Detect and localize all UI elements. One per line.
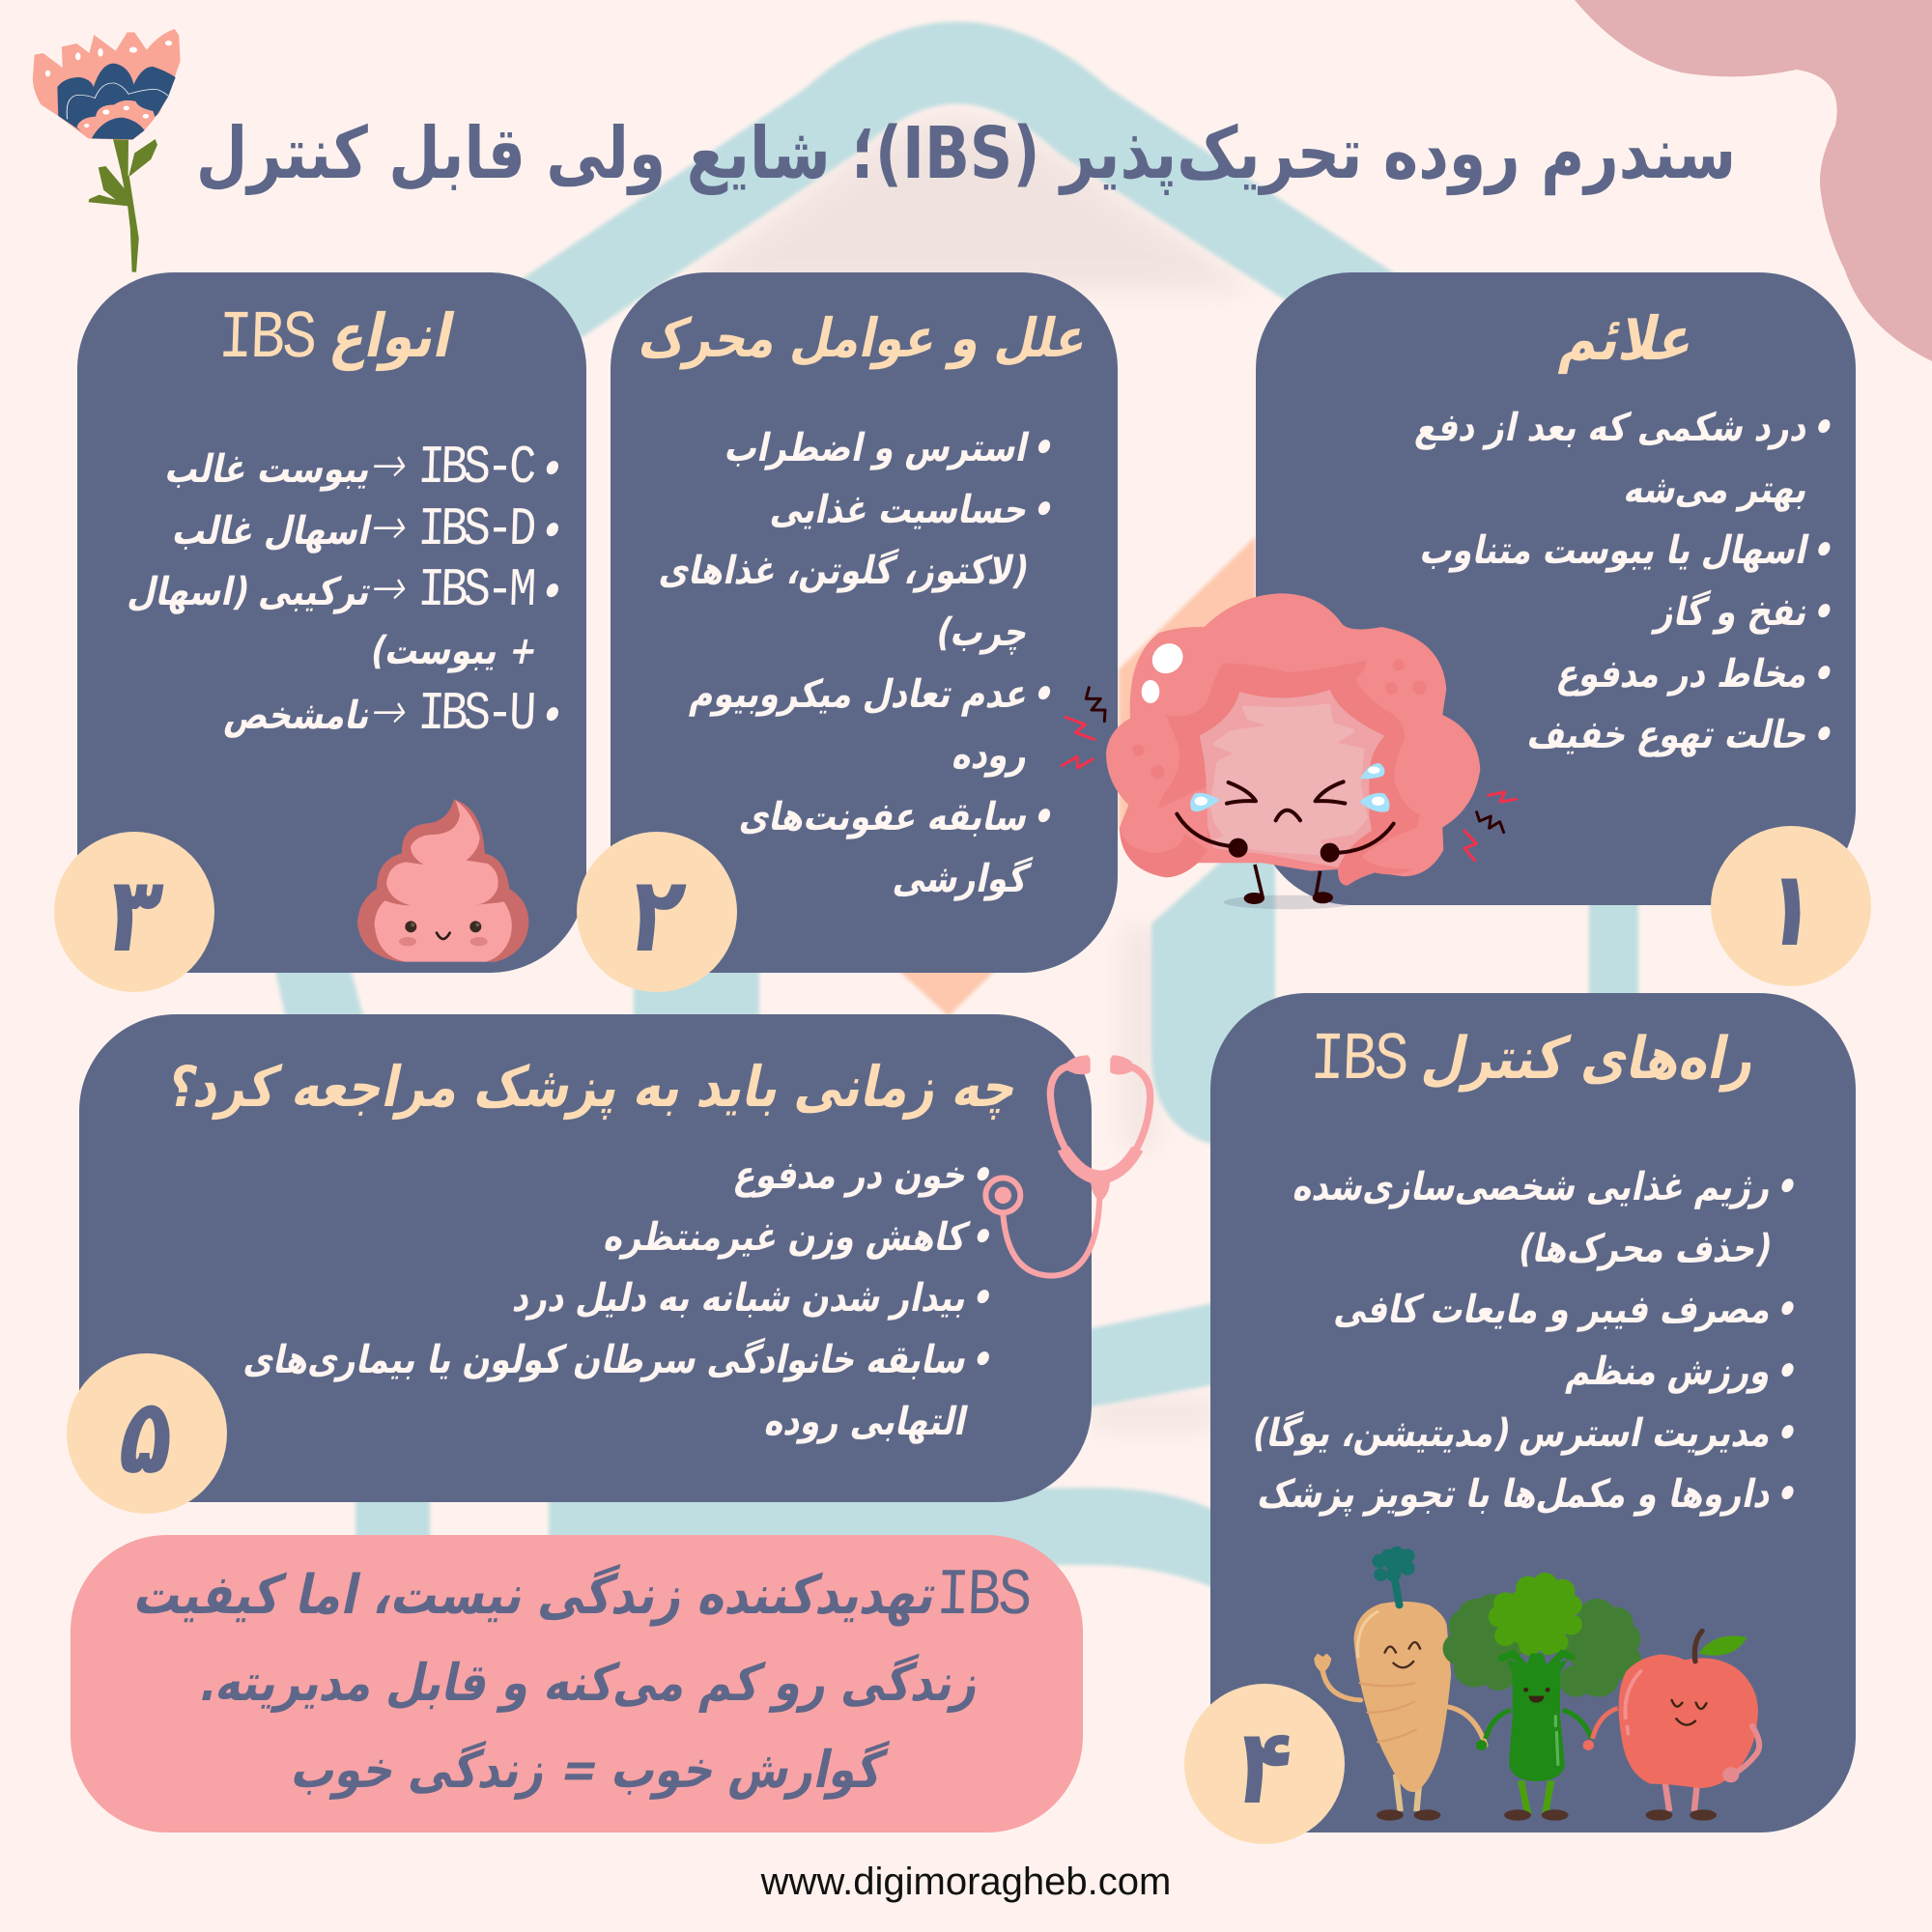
list: symptoms: • (1809, 406, 1839, 450)
title: سندرم روده تحریک‌پذیر (IBS)؛ شایع ولی قابل کنترل (196, 112, 1736, 195)
list: types: • (537, 570, 567, 614)
list: causes: • (1029, 426, 1059, 470)
list: causes: • (1029, 795, 1059, 839)
panel: types of IBS (77, 272, 586, 973)
list: types: IBS-U (417, 683, 533, 745)
list: symptoms: بهتر می‌شه (1621, 468, 1813, 512)
apple (1583, 1631, 1759, 1821)
list: doctor: بیدار شدن شبانه به دلیل درد (509, 1276, 972, 1321)
number badge 5: ۵ (112, 1377, 182, 1497)
number badge 2: ۲ (622, 855, 692, 976)
list: causes: (لاکتوز، گلوتن، غذاهای (656, 549, 1033, 593)
heading: types: انواع (326, 300, 461, 371)
list: management: رژیم غذایی شخصی‌سازی‌شده (1290, 1165, 1776, 1209)
list: types: IBS-C (417, 437, 533, 498)
list: causes: چرب) (932, 611, 1033, 655)
heading: types (216, 300, 461, 378)
callout: summary: تهدیدکننده زندگی نیست، اما کیفیت (129, 1564, 943, 1627)
list: doctor: کاهش وزن غیرمنتظره (601, 1215, 972, 1260)
list: causes: استرس و اضطراب (722, 426, 1033, 470)
list: types: →یبوست غالب (162, 437, 413, 495)
list: types: • (537, 447, 567, 492)
list: types: →ترکیبی (اسهال (125, 559, 413, 617)
list: management: (حذف محرک‌ها) (1515, 1227, 1776, 1271)
number badge 3: ۳ (99, 855, 169, 976)
list: management: داروها و مکمل‌ها با تجویز پزشک (1255, 1472, 1776, 1517)
list: symptoms: مخاط در مدفوع (1554, 652, 1813, 696)
list: symptoms: نفخ و گاز (1653, 590, 1813, 635)
list: causes (656, 426, 1059, 901)
callout: summary: IBS (935, 1559, 1030, 1634)
number badge 5 (67, 1353, 227, 1514)
broccoli (1443, 1573, 1642, 1821)
heading: causes: علل و عوامل محرک (635, 307, 1094, 370)
list: management: • (1773, 1472, 1803, 1517)
list: types: • (537, 509, 567, 554)
number badge 1 (1711, 826, 1871, 986)
callout: summary (71, 1535, 1083, 1833)
list: symptoms: • (1809, 713, 1839, 757)
callout: summary: گوارش خوب = زندگی خوب (287, 1741, 890, 1800)
list: causes: روده (949, 733, 1033, 778)
list: management: • (1773, 1350, 1803, 1394)
list: doctor: التهابی روده (761, 1400, 972, 1444)
list: management: • (1773, 1165, 1803, 1209)
heading: doctor: چه زمانی باید به پزشک مراجعه کرد؟ (161, 1054, 1025, 1120)
list: management: مدیریت استرس (مدیتیشن، یوگا) (1249, 1411, 1776, 1456)
panel: causes and triggers (611, 272, 1118, 973)
list: management: مصرف فیبر و مایعات کافی (1331, 1288, 1776, 1332)
list: symptoms: • (1809, 590, 1839, 635)
heading: types: IBS (216, 301, 315, 378)
heading: management (1309, 1023, 1763, 1099)
list: symptoms: حالت تهوع خفیف (1524, 713, 1813, 757)
list: types (125, 437, 567, 745)
list: types: IBS-D (417, 498, 533, 560)
list: symptoms: • (1809, 652, 1839, 696)
list: symptoms: اسهال یا یبوست متناوب (1417, 528, 1813, 573)
panel: symptoms (1256, 272, 1856, 905)
panel: management (1210, 993, 1856, 1833)
footer website: www.digimoragheb.com (761, 1861, 1171, 1903)
list: doctor: سابقه خانوادگی سرطان کولون یا بیماری‌های (241, 1338, 972, 1382)
number badge 4: ۴ (1230, 1707, 1299, 1828)
list: doctor: • (968, 1153, 998, 1198)
list: causes: سابقه عفونت‌های (736, 795, 1033, 839)
number badge 1: ۱ (1756, 849, 1826, 970)
list: doctor: • (968, 1215, 998, 1260)
list: causes: • (1029, 672, 1059, 717)
carrot (1314, 1547, 1486, 1821)
list: symptoms (1412, 406, 1839, 757)
heading: management: راه‌های کنترل (1417, 1025, 1763, 1093)
list: doctor (241, 1153, 998, 1444)
panel: when to see a doctor (79, 1014, 1092, 1502)
number badge 3 (54, 832, 214, 992)
list: doctor: • (968, 1338, 998, 1382)
number badge 4 (1184, 1684, 1345, 1844)
list: management (1249, 1165, 1803, 1517)
callout: summary: زندگی رو کم می‌کنه و قابل مدیریته. (195, 1654, 986, 1712)
list: types: • (537, 694, 567, 738)
list: symptoms: • (1809, 528, 1839, 573)
list: types: + یبوست) (367, 629, 542, 673)
heading: management: IBS (1309, 1023, 1407, 1099)
list: types: →نامشخص (221, 683, 413, 741)
list: causes: عدم تعادل میکروبیوم (687, 672, 1033, 717)
list: causes: گوارشی (890, 857, 1033, 901)
list: management: • (1773, 1411, 1803, 1456)
list: management: • (1773, 1288, 1803, 1332)
list: types: IBS-M (417, 559, 533, 621)
list: doctor: • (968, 1276, 998, 1321)
list: causes: • (1029, 488, 1059, 532)
list: doctor: خون در مدفوع (730, 1153, 972, 1198)
heading: symptoms: علائم (1554, 303, 1702, 374)
list: causes: حساسیت غذایی (767, 488, 1033, 532)
number badge 2 (577, 832, 737, 992)
list: types: →اسهال غالب (169, 498, 413, 556)
list: symptoms: درد شکمی که بعد از دفع (1412, 406, 1813, 450)
list: management: ورزش منظم (1563, 1350, 1776, 1394)
